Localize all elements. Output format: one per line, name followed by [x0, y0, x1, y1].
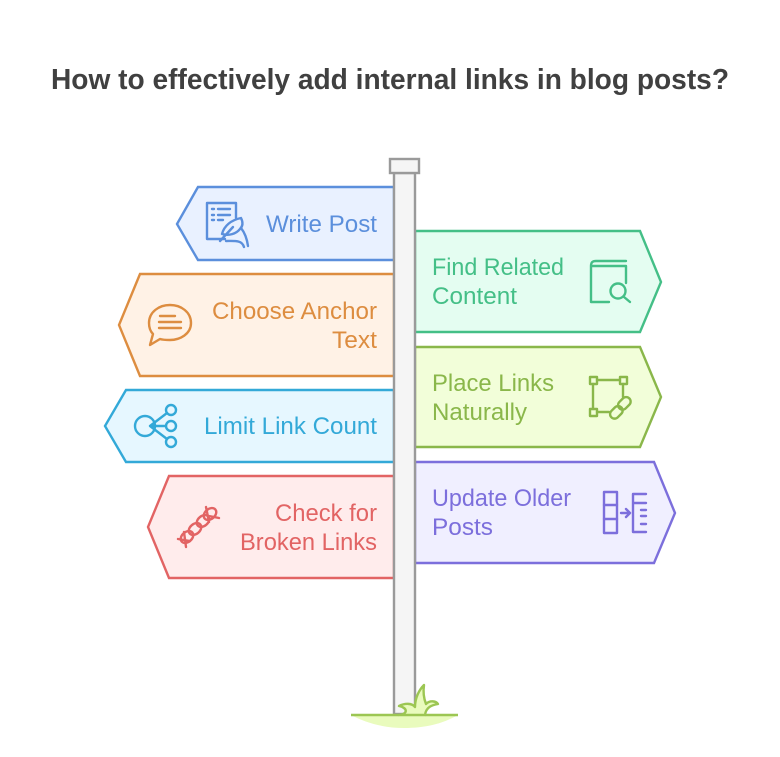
signpost pole — [390, 159, 419, 714]
pole cap — [390, 159, 419, 173]
panel: Find Related Content — [415, 231, 661, 332]
panel: Check for Broken Links — [148, 476, 394, 578]
panel: Update Older Posts — [415, 462, 675, 563]
label: Place Links Naturally: Place Links — [432, 370, 554, 397]
icon: branching nodes — [135, 405, 176, 447]
label: Write Post: Write Post — [266, 211, 377, 238]
label: Check for Broken Links: Broken Links — [240, 529, 377, 556]
panel: Write Post — [177, 187, 394, 260]
label: Check for Broken Links: Check for — [275, 500, 377, 527]
label: Choose Anchor Text: Text — [332, 327, 377, 354]
icon: broken chain — [178, 506, 219, 547]
icon: square path with link — [590, 377, 632, 420]
panel: Limit Link Count — [105, 390, 394, 462]
panel: Choose Anchor Text — [119, 274, 394, 376]
icon: speech bubble — [149, 305, 191, 345]
label: Update Older Posts: Posts — [432, 514, 493, 541]
label: Find Related Content: Content — [432, 283, 517, 310]
icon: table to list — [604, 492, 646, 533]
label: Limit Link Count: Limit Link Count — [204, 413, 377, 440]
grass base — [351, 685, 458, 728]
title: How to effectively add internal links in blog posts? — [51, 64, 729, 96]
label: Place Links Naturally: Naturally — [432, 399, 527, 426]
icon: book with magnifier — [591, 261, 630, 302]
label: Find Related Content: Find Related — [432, 254, 564, 281]
label: Choose Anchor Text: Choose Anchor — [212, 298, 377, 325]
panel: Place Links Naturally — [415, 347, 661, 447]
icon: document and quill — [207, 203, 248, 247]
label: Update Older Posts: Update Older — [432, 485, 571, 512]
